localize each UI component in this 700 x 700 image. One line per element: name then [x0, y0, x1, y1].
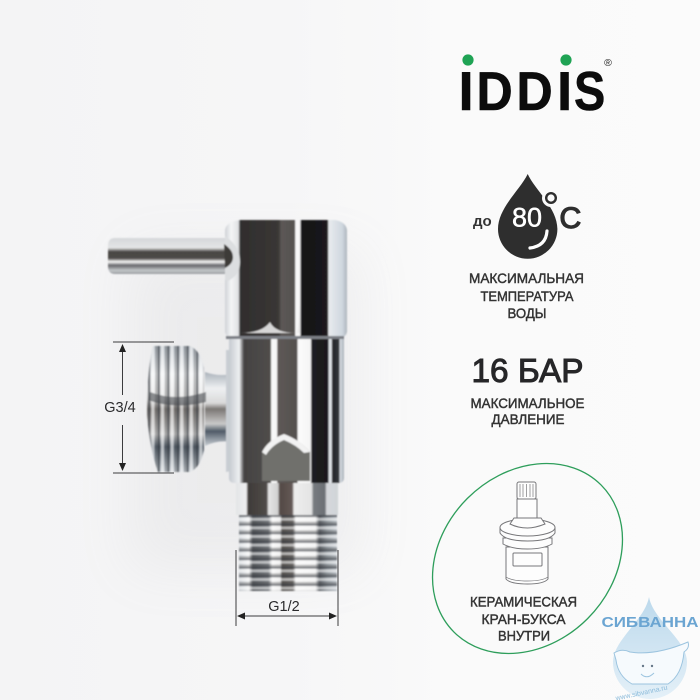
- temperature icon: до 80°C: 80: [512, 202, 542, 232]
- upper valve cap: [225, 220, 347, 339]
- watermark: Сибванна: [602, 597, 699, 700]
- logo: IDDIS: I: [557, 61, 572, 122]
- threaded bottom connector G1/2: [236, 483, 338, 591]
- logo: IDDIS: [458, 54, 612, 122]
- text: max pressure: [470, 395, 584, 427]
- text: ceramic cartridge caption: [470, 594, 577, 644]
- text: ceramic cartridge caption: КРАН-БУКСА: [482, 611, 566, 627]
- dimension G3/4: [104, 342, 174, 473]
- dimension G3/4: G3/4: [104, 400, 136, 416]
- text: max temperature: МАКСИМАЛЬНАЯ: [469, 270, 584, 286]
- lower valve body: [229, 338, 344, 483]
- threaded side outlet G3/4: [147, 346, 249, 472]
- watermark: Сибванна: СИБВАННА: [602, 615, 699, 631]
- text: max pressure: ДАВЛЕНИЕ: [492, 411, 564, 427]
- temperature icon: до 80°C: до: [473, 213, 492, 230]
- text: max pressure: МАКСИМАЛЬНОЕ: [470, 395, 584, 411]
- dimension G1/2: G1/2: [268, 599, 300, 615]
- text: ceramic cartridge caption: ВНУТРИ: [498, 628, 550, 644]
- temperature icon: до 80°C: C: [560, 202, 581, 235]
- product photo: angle valve: [108, 220, 347, 591]
- logo: IDDIS: D: [516, 62, 553, 122]
- logo: IDDIS: S: [574, 61, 605, 122]
- green ellipse outline: [394, 425, 661, 692]
- logo: IDDIS: ®: [604, 57, 612, 69]
- text: max temperature: [469, 270, 584, 321]
- product shadow: [130, 250, 360, 570]
- icon: ceramic cartridge: [500, 482, 555, 584]
- logo: IDDIS: I: [458, 61, 474, 122]
- text: ceramic cartridge caption: КЕРАМИЧЕСКАЯ: [470, 594, 577, 610]
- logo: IDDIS: D: [476, 62, 513, 122]
- valve handle: [108, 236, 240, 281]
- heading: 16 БАР: 16 БАР: [472, 352, 584, 389]
- temperature icon: до 80°C: [473, 174, 581, 259]
- text: max temperature: ВОДЫ: [508, 305, 546, 321]
- dimension G1/2: [236, 550, 338, 626]
- text: max temperature: ТЕМПЕРАТУРА: [480, 288, 574, 304]
